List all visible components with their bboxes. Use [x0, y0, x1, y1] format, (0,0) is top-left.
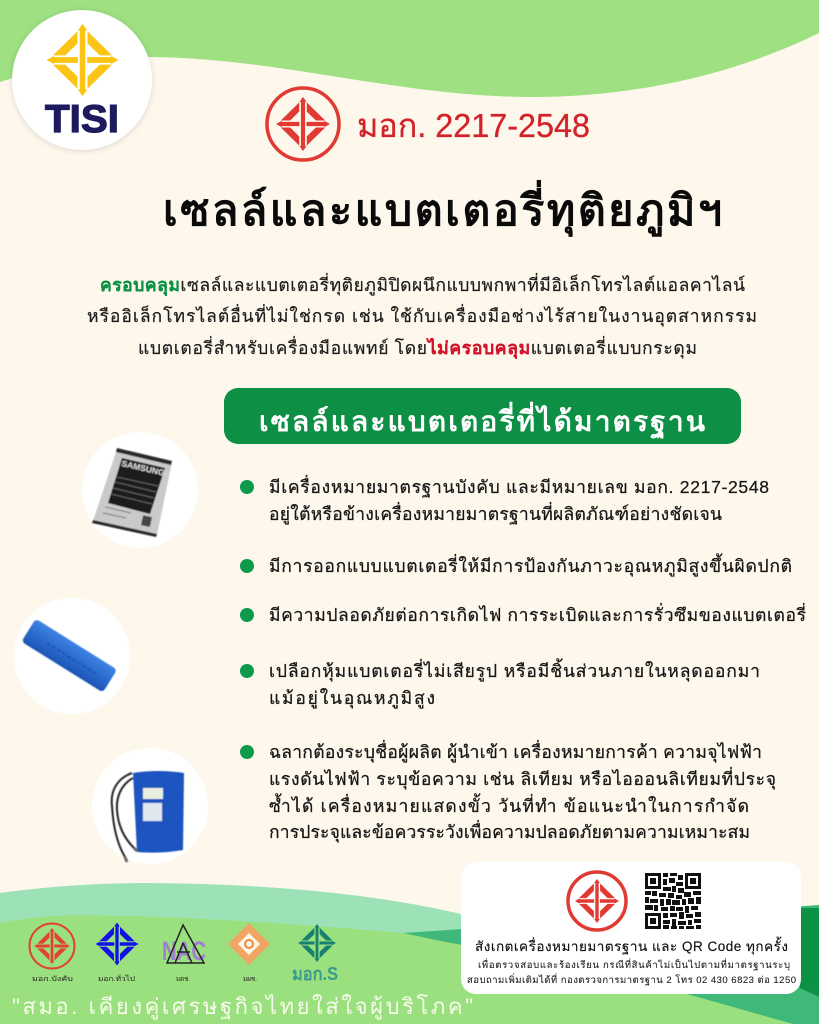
mark: orange: มผช.	[243, 976, 257, 983]
bottom wave: pale teal band	[0, 883, 470, 1024]
mark: general: มอก.ทั่วไป	[98, 974, 136, 983]
item: mandatory mark: มีเครื่องหมายมาตรฐานบังคับ และมีหมายเลข มอก. 2217-2548	[269, 475, 769, 498]
section heading pill	[224, 388, 741, 444]
title: เซลล์และแบตเตอรี่ทุติยภูมิฯ	[163, 180, 722, 238]
icon: red mandatory standard mark	[267, 88, 339, 160]
notice detail: เพื่อตรวจสอบและร้องเรียน กรณีที่สินค้าไม่เป็นไปตามที่มาตรฐานระบุ	[478, 958, 790, 971]
QR code	[645, 873, 701, 929]
slogan: "สมอ. เคียงคู่เศรษฐกิจไทยใส่ใจผู้บริโภค"	[12, 994, 473, 1020]
panel: QR notice card	[461, 862, 801, 994]
mark: mandatory	[30, 924, 74, 983]
mark: general	[96, 922, 138, 983]
standard number: มอก. 2217-2548	[357, 107, 590, 144]
item: mandatory mark: อยู่ใต้หรือข้างเครื่องหมายมาตรฐานที่ผลิตภัณฑ์อย่างชัดเจน	[269, 502, 722, 525]
photo: phone battery	[82, 432, 198, 548]
scope description	[87, 273, 757, 359]
section heading pill: เซลล์และแบตเตอรี่ที่ได้มาตรฐาน	[259, 401, 705, 440]
item: mandatory mark	[240, 475, 769, 525]
scope description: หรืออิเล็กโทรไลต์อื่นที่ไม่ใช่กรด เช่น ใช้กับเครื่องมือช่างไร้สายในงานอุตสาหกรรม	[87, 304, 757, 327]
mark: NAC	[162, 925, 206, 983]
mark: orange	[228, 923, 270, 983]
mark: mandatory: มอก.บังคับ	[32, 975, 73, 983]
notice heading: สังเกตเครื่องหมายมาตรฐาน และ QR Code ทุกครั้ง	[475, 936, 788, 955]
scope description: แบตเตอรี่สำหรับเครื่องมือแพทย์ โดยไม่ครอบคลุมแบตเตอรี่แบบกระดุม	[138, 336, 697, 359]
item: label requirements: การประจุและข้อควรระวังเพื่อความปลอดภัยตามความเหมาะสม	[269, 820, 750, 843]
item: casing: เปลือกหุ้มแบตเตอรี่ไม่เสียรูป หรือมีชิ้นส่วนภายในหลุดออกมา	[269, 658, 760, 682]
photo: cylindrical battery	[14, 598, 130, 714]
item: label requirements	[240, 740, 776, 843]
mark: teal S	[292, 924, 338, 984]
item: label requirements: แรงดันไฟฟ้า ระบุข้อความ เช่น ลิเทียม หรือไอออนลิเทียมที่ประจุ	[269, 767, 776, 790]
item: label requirements: ฉลากต้องระบุชื่อผู้ผลิต ผู้นำเข้า เครื่องหมายการค้า ความจุไฟฟ้า	[269, 740, 762, 763]
item: casing	[240, 658, 760, 709]
notice detail: สอบถามเพิ่มเติมได้ที่ กองตรวจการมาตรฐาน 2 โทร 02 430 6823 ต่อ 1250	[467, 973, 796, 986]
standards checklist	[240, 475, 806, 843]
bottom wave: dark green corner	[800, 908, 819, 997]
standard number heading	[267, 88, 590, 160]
photo: phone battery: SAMSUNG	[121, 458, 166, 478]
bottom wave: main light green	[0, 915, 793, 1024]
mark: NAC: NAC	[162, 936, 206, 966]
standard marks row	[30, 922, 338, 984]
top green wave	[0, 0, 819, 97]
mark: NAC: มตช.	[176, 976, 190, 983]
item: label requirements: ซ้ำได้ เครื่องหมายแสดงขั้ว วันที่ทำ ข้อแนะนำในการกำจัด	[269, 793, 749, 816]
item: fire and leak safety: มีความปลอดภัยต่อการเกิดไฟ การระเบิดและการรั่วซึมของแบตเตอรี่	[269, 603, 806, 625]
notice detail	[467, 958, 796, 986]
item: overheating protection: มีการออกแบบแบตเตอรี่ให้มีการป้องกันภาวะอุณหภูมิสูงขึ้นผิดปกติ	[269, 553, 792, 577]
icon: yellow TISI mark	[46, 24, 118, 96]
photo: battery pack	[92, 748, 208, 864]
icon: red standard mark	[568, 872, 626, 930]
scope description: ครอบคลุมเซลล์และแบตเตอรี่ทุติยภูมิปิดผนึกแบบพกพาที่มีอิเล็กโทรไลต์แอลคาไลน์	[100, 273, 745, 296]
TISI wordmark: TISI	[45, 98, 119, 141]
logo: TISI badge	[12, 10, 152, 150]
mark: teal S: มอก.S	[292, 964, 338, 984]
item: casing: แม้อยู่ในอุณหภูมิสูง	[269, 688, 435, 709]
bottom wave: mid green	[403, 905, 819, 1024]
